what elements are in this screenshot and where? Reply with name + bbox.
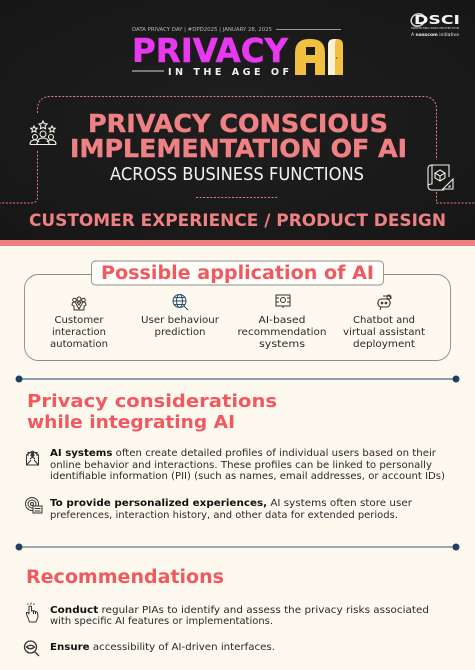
main title: PRIVACY CONSCIOUS bbox=[88, 109, 388, 138]
item: chatbot and virtual assistant deployment bbox=[343, 295, 425, 350]
item: user behaviour prediction: User behaviour bbox=[141, 315, 219, 326]
item: AI-based recommendation systems: systems bbox=[259, 339, 305, 350]
text block: preferences, interaction history, and other data for extended periods. bbox=[50, 510, 398, 521]
text block bbox=[50, 448, 445, 482]
DSCI logo bbox=[409, 12, 460, 38]
item: AI-based recommendation systems: recommendation bbox=[238, 327, 326, 338]
icon: product design blueprint bbox=[428, 165, 453, 190]
text block: with specific AI features or implementations. bbox=[50, 616, 273, 627]
text block: online behavior and interactions. These profiles can be linked to personally bbox=[50, 460, 433, 471]
header band bbox=[0, 0, 475, 240]
icon: magnifier with eye bbox=[24, 641, 39, 656]
item: customer interaction automation: automation bbox=[50, 339, 108, 350]
text block: identifiable information (PII) (such as names, email addresses, or account IDs) bbox=[50, 471, 445, 482]
item: customer interaction automation bbox=[50, 297, 108, 350]
recommendation: ensure accessibility bbox=[24, 641, 275, 656]
text block bbox=[50, 498, 412, 521]
dashed frame bbox=[0, 96, 475, 203]
text block: Conduct regular PIAs to identify and assess the privacy risks associated bbox=[50, 605, 429, 616]
item: user behaviour prediction: prediction bbox=[154, 327, 206, 338]
text block: To provide personalized experiences, AI systems often store user bbox=[50, 498, 412, 509]
item: chatbot and virtual assistant deployment: virtual assistant bbox=[343, 327, 425, 338]
item: AI-based recommendation systems: AI-based bbox=[258, 315, 306, 326]
function title: CUSTOMER EXPERIENCE / PRODUCT DESIGN bbox=[29, 211, 446, 230]
subtitle: ACROSS BUSINESS FUNCTIONS bbox=[110, 165, 364, 185]
event line: DATA PRIVACY DAY | #DPD2025 | JANUARY 28, 2025 bbox=[132, 27, 272, 33]
main title bbox=[70, 109, 407, 163]
item: chatbot and virtual assistant deployment: deployment bbox=[353, 339, 415, 350]
heading: recommendations: Recommendations bbox=[26, 567, 224, 588]
item: user behaviour prediction bbox=[141, 294, 219, 338]
divider bbox=[16, 544, 460, 550]
heading: privacy considerations: while integrating AI bbox=[27, 412, 235, 433]
heading: privacy considerations: Privacy considerations bbox=[27, 391, 277, 412]
item: AI-based recommendation systems bbox=[238, 295, 326, 350]
item: customer interaction automation: interaction bbox=[52, 327, 106, 338]
icon: envelope with profile bbox=[26, 451, 38, 465]
text block bbox=[50, 605, 429, 627]
DSCI logo: PROMOTING DATA PROTECTION bbox=[411, 26, 459, 30]
panel: possible application of AI bbox=[24, 261, 450, 360]
DSCI logo: DSCI bbox=[414, 12, 460, 27]
divider bbox=[16, 376, 460, 382]
text block: Ensure accessibility of AI-driven interfaces. bbox=[50, 642, 275, 653]
icon: AI target with data card bbox=[26, 498, 42, 513]
event logo: privacy in the age of AI: IN THE AGE OF bbox=[168, 67, 289, 78]
event logo: privacy in the age of AI: PRIVACY bbox=[132, 31, 289, 70]
event logo: privacy in the age of AI bbox=[132, 31, 343, 78]
DSCI logo: A nasscom initiative bbox=[411, 32, 459, 38]
text block: AI systems often create detailed profiles of individual users based on their bbox=[50, 448, 436, 459]
accent stripe bbox=[0, 240, 475, 246]
panel heading: Possible application of AI bbox=[101, 263, 374, 284]
heading: privacy considerations bbox=[27, 391, 277, 433]
item: customer interaction automation: Customer bbox=[54, 315, 104, 326]
recommendation: conduct PIAs bbox=[26, 602, 429, 627]
main title: IMPLEMENTATION OF AI bbox=[70, 134, 407, 163]
consideration: extended storage bbox=[26, 498, 412, 521]
icon: people with stars bbox=[30, 121, 56, 144]
item: chatbot and virtual assistant deployment: Chatbot and bbox=[353, 315, 415, 326]
icon: pointing hand bbox=[26, 602, 38, 622]
consideration: user profiles bbox=[26, 448, 445, 482]
